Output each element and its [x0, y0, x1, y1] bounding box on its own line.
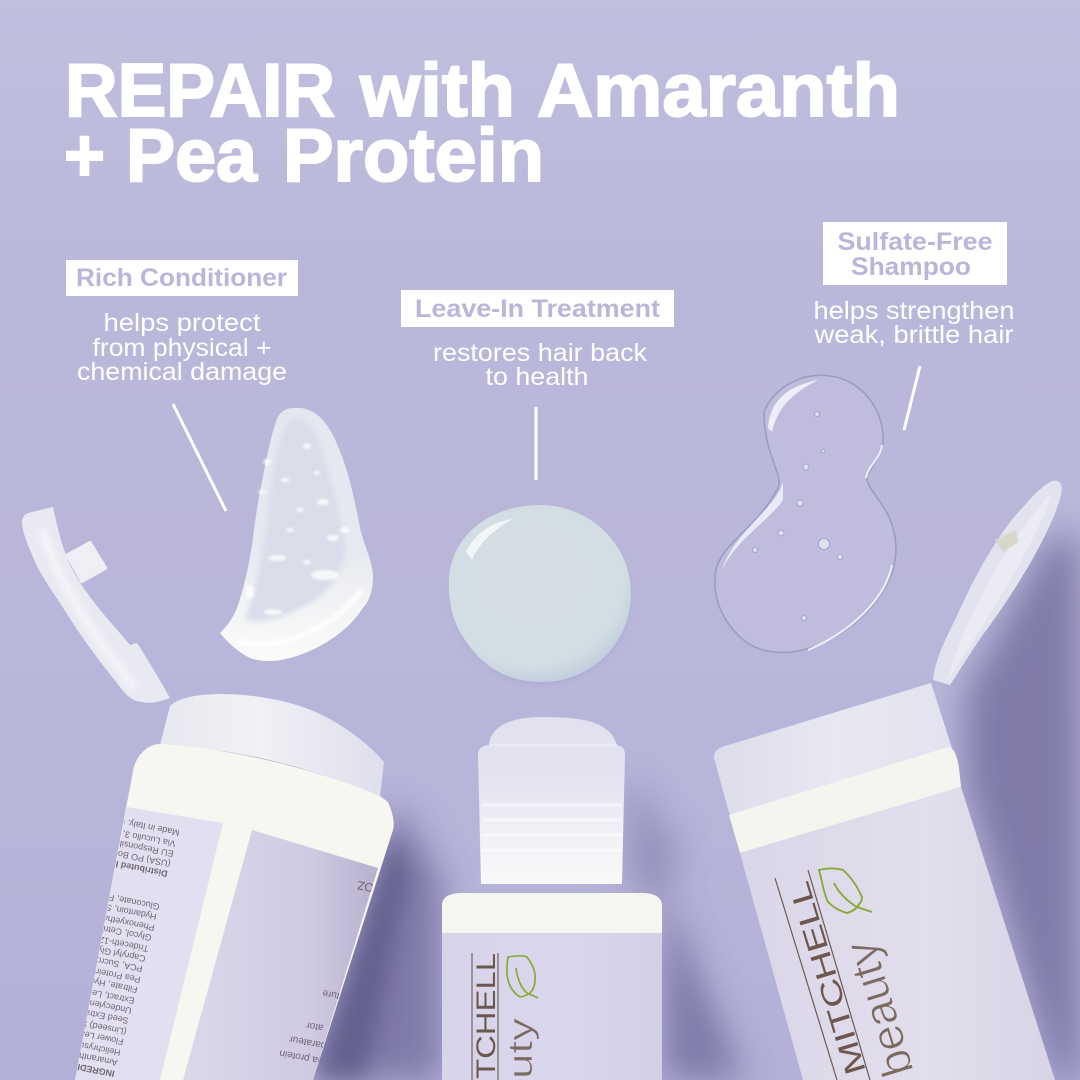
label text: Helichrysum Italicum: [38, 1032, 121, 1058]
icon: open flip cap: [22, 507, 170, 703]
label text: Via Lucullo 3, 00187 Rome: [69, 818, 176, 849]
bottle label: [740, 787, 1055, 1080]
bottle label: [442, 933, 662, 1080]
callout: leave-in treatment: Leave-In Treatment: [415, 295, 661, 323]
label text: Gluconate, Panthenol: [73, 886, 160, 912]
label text: Extract, Lecithin: [71, 984, 135, 1006]
label text: Glycol, Cetrimonium: [71, 918, 152, 943]
product: conditioner bottle: texture: [321, 987, 354, 1004]
callout: sulfate-free shampoo: Sulfate-Free: [838, 228, 993, 256]
label text: Made in Italy. GMG3PA: [87, 810, 180, 838]
callout: rich conditioner: from physical +: [92, 334, 272, 362]
brand logo: [775, 868, 924, 1080]
label text: Trideceth-12, Polyquat: [58, 927, 149, 954]
label text: Flower Leaf, Stem: [51, 1023, 124, 1047]
title: Protein: [283, 113, 544, 197]
label text: Seed Extract, Glycine: [43, 1000, 129, 1026]
brand logo: beauty: [834, 935, 924, 1080]
label text: [78, 819, 180, 1077]
callout: rich conditioner: chemical damage: [77, 358, 287, 386]
callout: sulfate-free shampoo: weak, brittle hair: [813, 321, 1014, 349]
front label panel: [183, 830, 378, 1080]
bottle shadows: [310, 535, 1080, 1080]
product: conditioner bottle: [20, 507, 394, 1080]
pump cap: [478, 717, 625, 884]
callout: rich conditioner: helps protect: [104, 309, 261, 337]
callout: leave-in treatment: [401, 290, 674, 480]
callout: leave-in treatment: to health: [486, 363, 588, 391]
label text: (Linseed) Seed, Bis: [48, 1012, 127, 1037]
brand logo: TCHELL: [471, 953, 501, 1079]
label text: EU Responsible Person: [79, 831, 174, 859]
product: shampoo bottle: [714, 481, 1062, 1080]
title: REPAIR: [65, 48, 335, 132]
label text: Amaranthus, Verbascum: [20, 1039, 118, 1068]
bottle shoulder: [442, 893, 662, 934]
label text: Hydantoin, Sodium: [81, 898, 157, 922]
swatch: conditioner cream: [220, 408, 373, 661]
label text: Pea Protein, Aqua: [68, 961, 141, 985]
callout: rich conditioner: Rich Conditioner: [76, 264, 287, 292]
bottle collar: [729, 748, 961, 853]
product: conditioner bottle: pea protein: [278, 1047, 330, 1067]
title: with: [359, 48, 515, 132]
callout: leave-in treatment: restores hair back: [433, 339, 648, 367]
product: conditioner bottle: réparateur: [288, 1033, 336, 1053]
cap collar: [160, 694, 384, 796]
callout: sulfate-free shampoo: Shampoo: [851, 253, 971, 281]
label text: Distributed by JPMS: [81, 852, 168, 879]
back label panel: [75, 807, 223, 1080]
icon: open flip cap: [933, 481, 1062, 685]
callout: sulfate-free shampoo: helps strengthen: [814, 297, 1014, 325]
title: [64, 48, 900, 197]
label text: Phenoxyethanol, Hexyl: [63, 905, 155, 933]
product: conditioner bottle: ator: [305, 1019, 324, 1033]
swatch: shampoo gel: [715, 375, 896, 652]
title: Pea: [126, 113, 258, 197]
label text: PCA, Sucrose, Sodium: [51, 946, 143, 974]
bottle body: [75, 744, 394, 1080]
brand logo: uty: [502, 1018, 540, 1079]
label text: Undecylenate, Iso: [60, 992, 132, 1016]
swatch: leave-in treatment pool: [449, 505, 631, 683]
cap collar: [714, 683, 952, 816]
callout: sulfate-free shampoo: [813, 222, 1014, 430]
callout: rich conditioner: [66, 260, 298, 511]
title: +: [64, 113, 105, 197]
label text: Caprylyl Glycol, Hydro: [57, 937, 146, 964]
brand logo: MITCHELL: [784, 878, 873, 1078]
product: leave-in treatment bottle: [442, 717, 662, 1080]
brand logo: [471, 953, 540, 1080]
label text: (USA) PO Box 10597: [85, 843, 171, 869]
title: Amaranth: [537, 48, 900, 132]
label text: INGREDIENTS: [53, 1057, 115, 1079]
cap peg: [68, 543, 105, 581]
label text: Filtrate, Hydrolyzed: [60, 970, 138, 995]
product: conditioner bottle: 2 OZ: [356, 878, 385, 897]
